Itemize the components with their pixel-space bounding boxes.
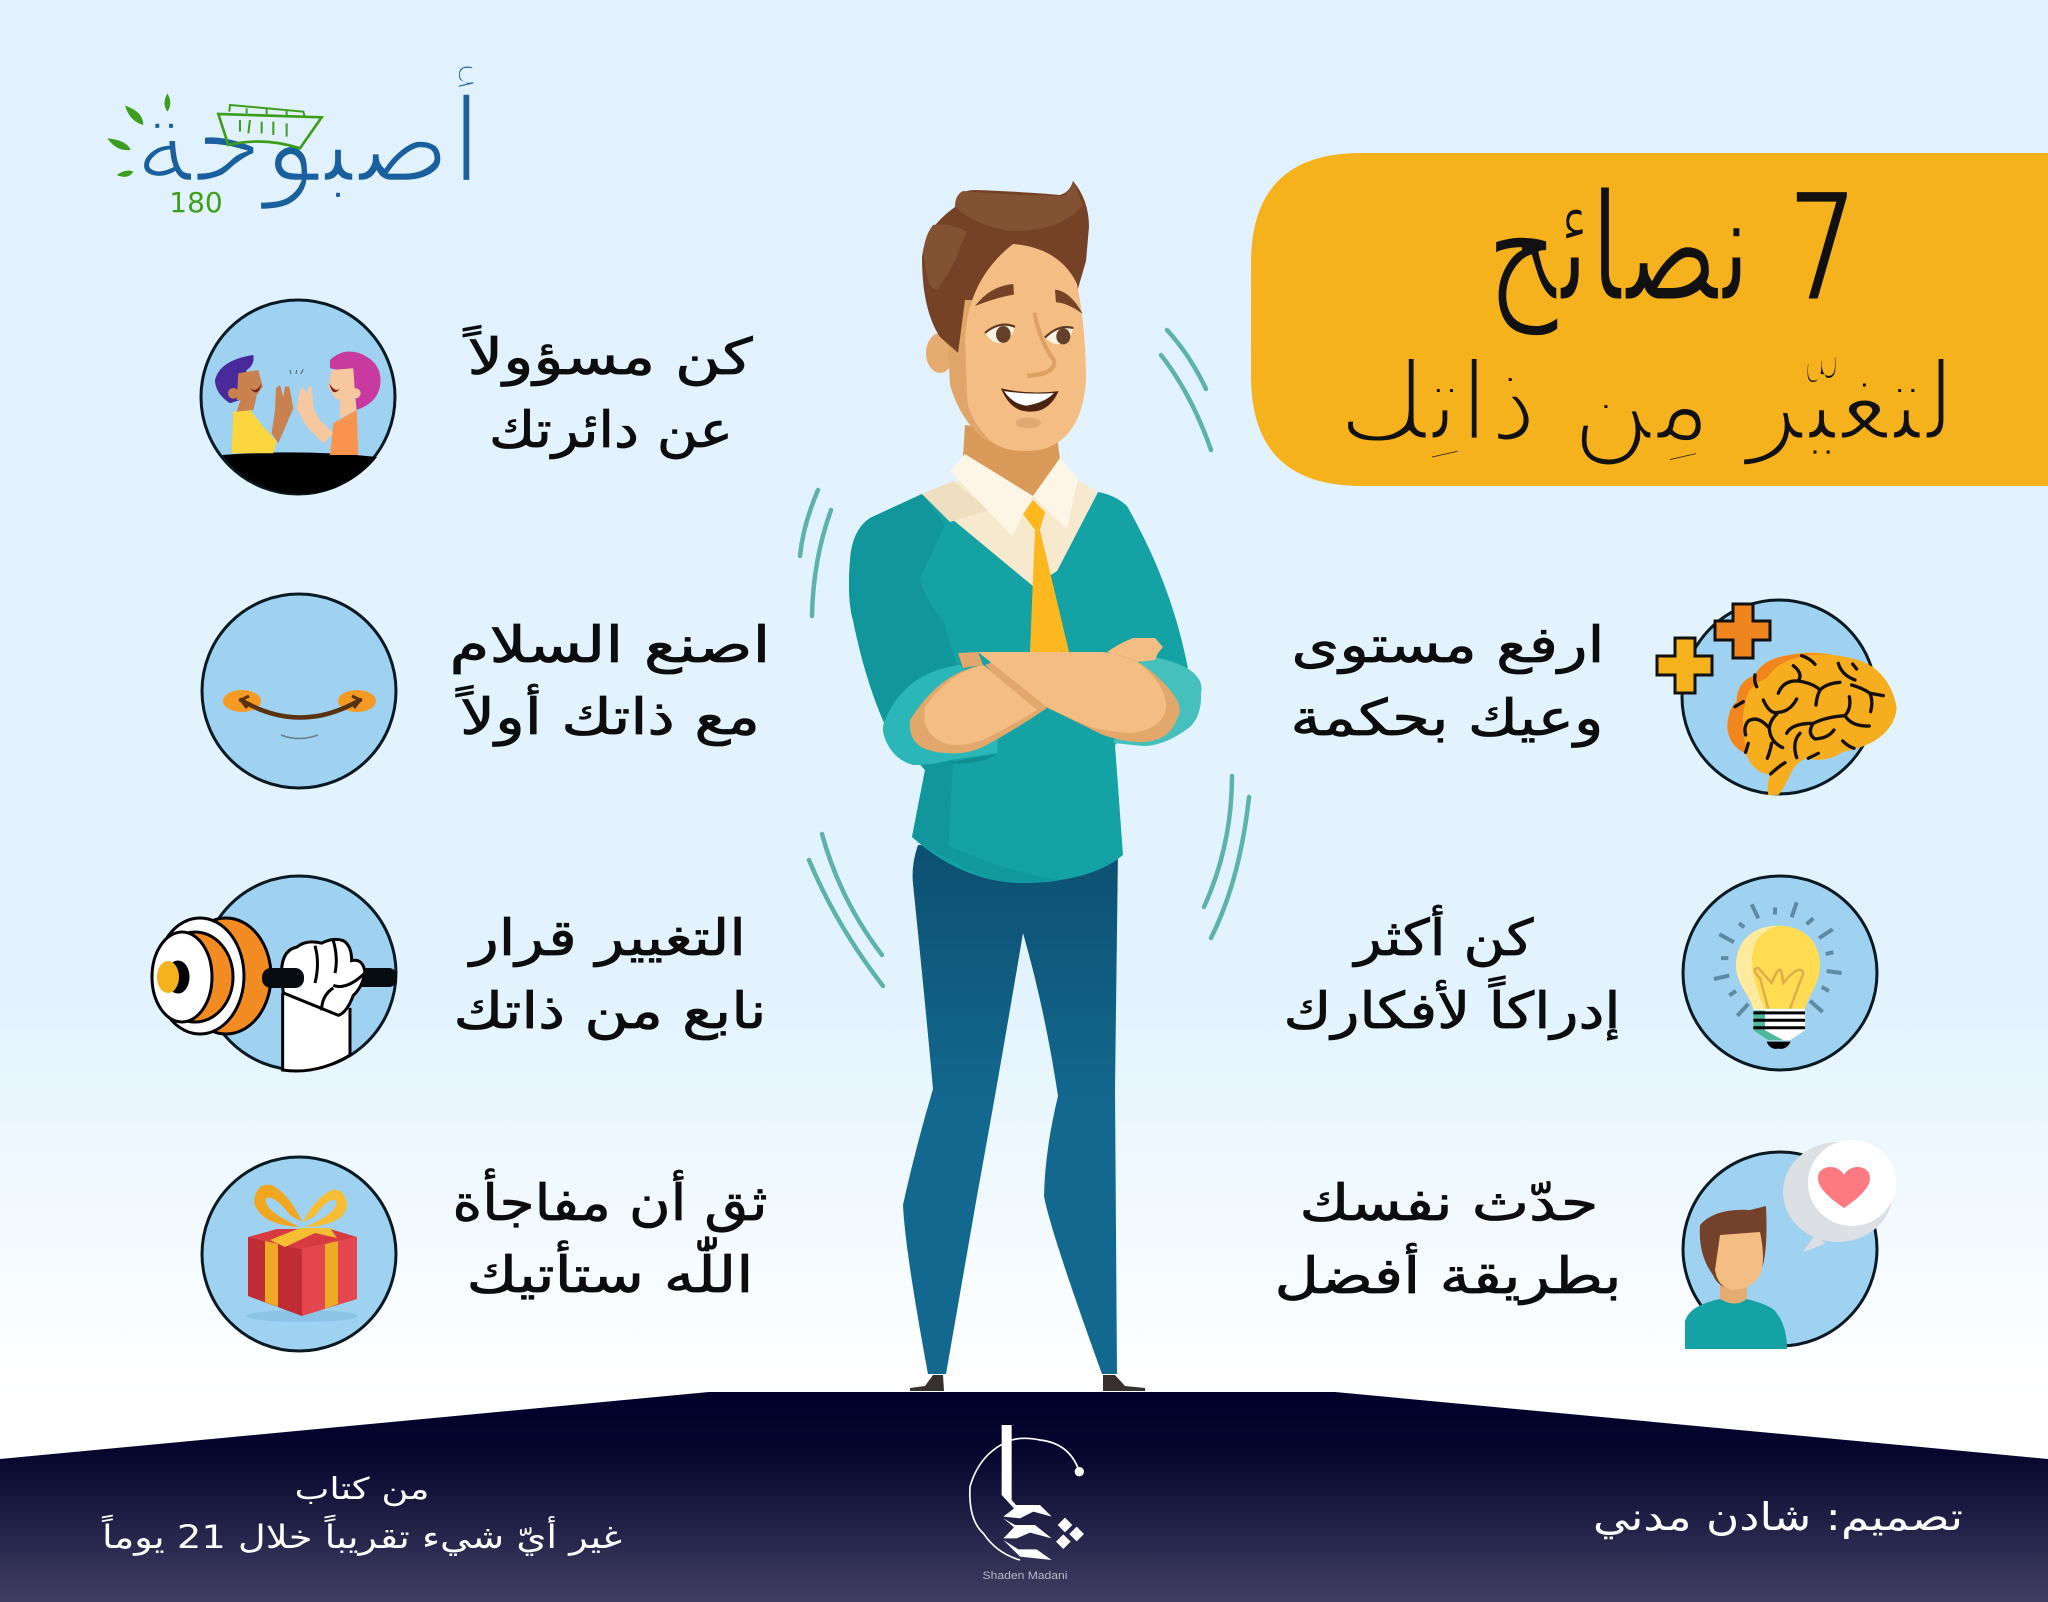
logo: Osboha 180: أصبوحة: [134, 64, 482, 211]
hair: [922, 181, 1089, 353]
left forearm: [910, 665, 1047, 753]
tip text: talk to yourself: [1274, 1174, 1622, 1305]
tip text: be responsible: عن دائرتك: [489, 401, 733, 459]
nose: [1027, 313, 1054, 376]
mouth: [1001, 388, 1059, 412]
sweater: [849, 492, 1190, 883]
neck: [963, 425, 1060, 496]
tip text: make peace: مع ذاتك أولاً: [455, 684, 760, 747]
cuff shadow: [950, 754, 996, 764]
icon: light bulb: [1683, 876, 1877, 1070]
tip text: be aware of thoughts: [1284, 905, 1620, 1041]
source book credit: [101, 1472, 622, 1556]
tip text: make peace: [450, 616, 770, 747]
right forearm: [978, 652, 1180, 742]
tip text: raise awareness: ارفع مستوى: [1292, 616, 1604, 675]
title line 2: لتغيّر مِن ذاتِك: [1338, 338, 1956, 467]
designer name latin: Shaden Madani: [982, 1570, 1068, 1582]
hair highlights: [923, 181, 1083, 290]
eyebrows: [975, 284, 1083, 314]
brain: [1727, 652, 1897, 795]
title banner: [1251, 153, 2048, 486]
face shadow: [948, 300, 1050, 449]
left cuff: [883, 665, 1000, 765]
logo: Osboha 180: 180: [169, 186, 223, 219]
footer band: [0, 1392, 2048, 1602]
tip text: change is a decision: نابع من ذاتك: [454, 982, 766, 1041]
tie: [1023, 500, 1069, 652]
person: [1685, 1206, 1787, 1349]
collar: [950, 454, 1078, 536]
tip text: talk to yourself: حدّث نفسك: [1300, 1174, 1598, 1232]
right hand: [1107, 638, 1163, 662]
face: [965, 244, 1086, 451]
icon: smile: [202, 594, 396, 788]
source book credit: غير أيّ شيء تقريباً خلال 21 يوماً: [101, 1514, 622, 1556]
eyes: [985, 325, 1015, 343]
tip text: be responsible: [463, 325, 753, 459]
left hand and band: [958, 652, 1048, 710]
speech bubble with heart: [1783, 1140, 1896, 1252]
plus signs: [1657, 638, 1712, 693]
tip text: change is a decision: [454, 909, 766, 1041]
tip text: raise awareness: وعيك بحكمة: [1290, 689, 1604, 748]
tip text: make peace: اصنع السلام: [450, 616, 770, 675]
ear: [926, 333, 954, 373]
shirt V-neck: [922, 470, 1098, 586]
designer credit: تصميم: شادن مدني: [1593, 1495, 1963, 1539]
trousers: [903, 845, 1118, 1374]
icon: brain with plus signs: [1657, 600, 1897, 795]
tip text: be aware of thoughts: إدراكاً لأفكارك: [1284, 975, 1620, 1041]
tip text: talk to yourself: بطريقة أفضل: [1274, 1243, 1622, 1305]
tip text: change is a decision: التغيير قرار: [466, 909, 746, 967]
source book credit: من كتاب: [294, 1472, 430, 1507]
tip text: be aware of thoughts: كن أكثر: [1351, 905, 1534, 967]
tip text: raise awareness: [1290, 616, 1604, 748]
central figure: man with crossed arms: [849, 181, 1202, 1391]
icon: gift box: [202, 1157, 396, 1351]
icon: barbell and fist: [152, 876, 397, 1071]
tip text: trust: اللّٰه ستأتيك: [466, 1236, 754, 1304]
right cuff: [1113, 655, 1202, 746]
designer logo: [970, 1425, 1084, 1582]
tip text: trust: ثق أن مفاجأة: [452, 1168, 768, 1232]
icon: person with heart speech bubble: [1683, 1140, 1896, 1349]
tip text: be responsible: كن مسؤولاً: [463, 325, 753, 387]
icon: clapping friends: [201, 300, 395, 494]
chin shadow: [1016, 418, 1041, 428]
shoes: [910, 1375, 1145, 1391]
tip text: trust: [452, 1168, 768, 1304]
title line 1: 7 نصائح: [1486, 162, 1858, 337]
motion lines around figure: [800, 330, 1249, 986]
